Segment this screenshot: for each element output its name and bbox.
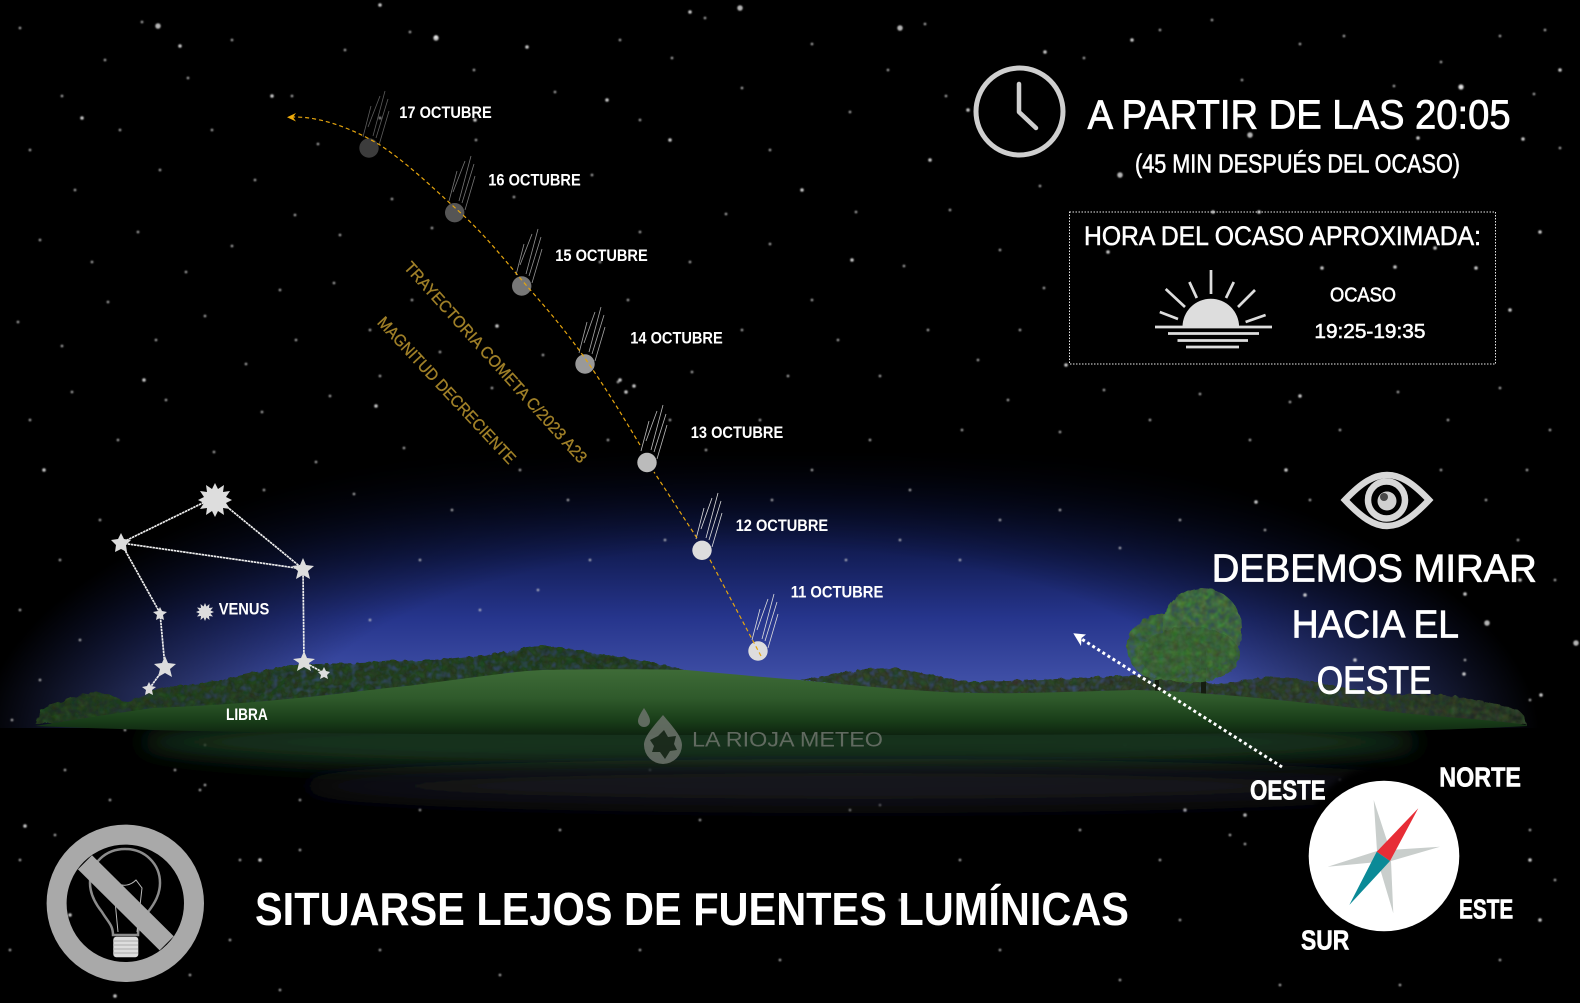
arrow: toward the west bbox=[1073, 633, 1282, 767]
reflection under the meadow bbox=[140, 712, 1420, 806]
landscape: hills, bushes and meadow bbox=[35, 588, 1527, 806]
comet: 15 octubre: 15 OCTUBRE bbox=[555, 247, 648, 265]
icon: no light bulb bbox=[57, 835, 194, 972]
background: night sky bbox=[0, 473, 1525, 728]
icon: sunset bbox=[1155, 270, 1272, 347]
heading: look west: DEBEMOS MIRAR bbox=[1212, 548, 1537, 591]
icon: eye bbox=[1345, 475, 1429, 526]
bushes left bbox=[36, 646, 686, 724]
tree bbox=[1127, 588, 1242, 698]
comet: 13 octubre: 13 OCTUBRE bbox=[691, 424, 783, 442]
comet: 17 octubre: 17 OCTUBRE bbox=[399, 104, 492, 122]
subheading: after sunset: (45 MIN DESPUÉS DEL OCASO) bbox=[1135, 150, 1460, 179]
comet: 15 octubre bbox=[512, 229, 648, 296]
meadow bbox=[35, 669, 1527, 735]
comet: 11 octubre: 11 OCTUBRE bbox=[791, 584, 883, 602]
red needle bbox=[1377, 808, 1418, 861]
panel heading: HORA DEL OCASO APROXIMADA: bbox=[1084, 221, 1481, 251]
label: ocaso: OCASO bbox=[1330, 285, 1396, 307]
icon: clock bbox=[976, 68, 1063, 155]
compass labels: SUR bbox=[1301, 924, 1349, 955]
panel: sunset time bbox=[1070, 212, 1496, 364]
constellation: Libra bbox=[111, 483, 330, 724]
comet: 16 octubre bbox=[445, 156, 581, 222]
compass labels bbox=[1250, 762, 1521, 955]
compass labels: NORTE bbox=[1439, 762, 1521, 793]
comet: 14 octubre: 14 OCTUBRE bbox=[630, 330, 723, 348]
watermark: La Rioja Meteo bbox=[638, 708, 883, 764]
comet: 11 octubre bbox=[748, 584, 883, 661]
Venus bbox=[196, 600, 269, 621]
label: magnitud: MAGNITUD DECRECIENTE bbox=[374, 314, 519, 468]
comet: 14 octubre bbox=[575, 307, 723, 374]
prohibition ring bbox=[57, 835, 194, 972]
comet: 17 octubre bbox=[359, 91, 492, 158]
heading: look west: OESTE bbox=[1317, 659, 1432, 702]
icon: drop with leaf bbox=[638, 708, 682, 764]
heading: look west: HACIA EL bbox=[1292, 603, 1459, 646]
Venus: VENUS bbox=[219, 600, 269, 618]
label: sunset range: 19:25-19:35 bbox=[1314, 321, 1425, 343]
comet: 13 octubre bbox=[637, 405, 783, 472]
label: Libra: LIBRA bbox=[226, 706, 268, 724]
compass labels: OESTE bbox=[1250, 774, 1326, 805]
heading: look west bbox=[1212, 548, 1537, 702]
teal needle bbox=[1349, 852, 1390, 905]
comet: 12 octubre: 12 OCTUBRE bbox=[736, 517, 828, 535]
heading: stay away from lights: SITUARSE LEJOS DE FUENTES LUMÍNICAS bbox=[255, 883, 1129, 935]
comet: 12 octubre bbox=[692, 493, 828, 560]
comet: 16 octubre: 16 OCTUBRE bbox=[488, 172, 581, 190]
arrow head bbox=[287, 113, 296, 122]
bushes right bbox=[800, 668, 1527, 725]
heading: time: A PARTIR DE LAS 20:05 bbox=[1088, 91, 1511, 137]
watermark: La Rioja Meteo: LA RIOJA METEO bbox=[692, 729, 883, 752]
grey points bbox=[1328, 800, 1440, 913]
bulb bbox=[90, 849, 160, 935]
label: trayectoria: TRAYECTORIA COMETA C/2023 A23 bbox=[400, 259, 590, 467]
compass bbox=[1302, 766, 1466, 931]
trajectory: dashed orange line bbox=[287, 113, 761, 656]
compass labels: ESTE bbox=[1459, 893, 1513, 924]
